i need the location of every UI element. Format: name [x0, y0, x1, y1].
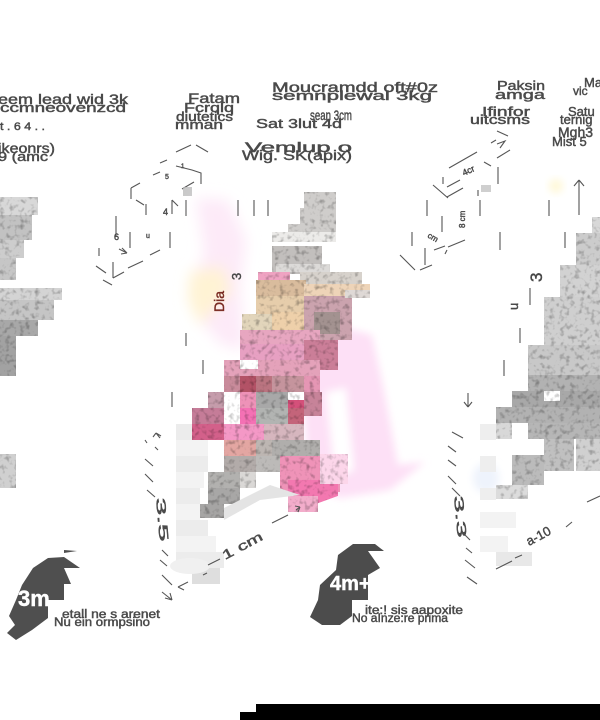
isometric box diagram: left: 4 — [163, 207, 168, 217]
heading: right spec text: vic — [573, 84, 588, 98]
heading: left spec text: eem lead wid 3k — [0, 91, 129, 107]
pale blue highlight — [473, 463, 499, 493]
caption: right badge — [352, 605, 463, 625]
pale shoe mosaic: bottom-centre — [170, 424, 300, 584]
isometric box diagram: right — [400, 131, 510, 270]
caption: right badge: No aInze:re prima — [352, 613, 449, 625]
isometric box diagram: right: 8 cm — [458, 210, 467, 228]
badge: left circular — [7, 550, 80, 640]
badge: right circular — [310, 544, 384, 625]
height label: right figure — [506, 273, 546, 310]
heading: right spec text: Mgh3 — [558, 124, 593, 140]
heading: right spec text: ternig — [560, 112, 593, 127]
heading: left-centre spec text: mman — [175, 117, 223, 132]
height label: right figure: 3 — [527, 273, 546, 282]
height label: left figure — [211, 273, 244, 312]
isometric box diagram: right: 4cr — [461, 163, 476, 178]
pink figure mosaic: centre — [192, 192, 370, 518]
heading: centre spec text: Sat 3lut 4d — [256, 116, 342, 131]
pale yellow spot — [549, 179, 563, 193]
heading: left spec text: t . 6 4 . . — [0, 121, 45, 133]
heading: right-centre spec text: Paksin — [497, 78, 545, 93]
heading: centre spec text: Wig. SK(apix) — [242, 147, 352, 163]
heading: centre spec text: semnplewal 3kg — [272, 88, 432, 103]
small parcel label: left box — [183, 187, 192, 196]
badge: left circular: 3m — [18, 586, 50, 611]
heading: centre spec text: sean 3cm — [310, 107, 352, 123]
heading: centre spec text: Vemlup o — [245, 139, 352, 155]
badge: right circular: 4m+ — [330, 573, 371, 595]
height dimension line: left figure — [172, 200, 268, 407]
caption: left badge — [54, 609, 161, 629]
heading: left-centre spec text: Fcrqlq — [184, 100, 234, 115]
small parcel label: right box — [481, 185, 491, 192]
base measurement labels: right figure: 3.3 — [451, 495, 470, 538]
pale shoe mosaic: right — [480, 424, 532, 566]
base measurement labels: left figure — [153, 497, 265, 563]
heading: left-centre spec text — [175, 90, 240, 132]
pale pink and yellow shape: centre-left — [188, 198, 246, 350]
heading: right spec text — [552, 75, 600, 149]
isometric box diagram: left: 6 — [114, 232, 119, 242]
height label: left figure: 3 — [229, 273, 244, 280]
caption: left badge: etall ne s arenet — [62, 609, 161, 621]
caption: left badge: Nu ein ormpsino — [54, 617, 150, 629]
base measurement labels: right figure — [451, 495, 553, 549]
base measurement labels: right figure: a-10 — [523, 523, 553, 549]
height label: left figure: Dia — [211, 291, 227, 312]
isometric box diagram: right: cm — [426, 231, 440, 244]
isometric box diagram: left: u — [146, 233, 150, 240]
base dimension: right figure — [448, 432, 600, 584]
heading: right-centre spec text: Ifinfor — [482, 104, 531, 119]
grey figure mosaic: right — [496, 217, 600, 499]
heading: centre spec text: Moucramdd oft#0z — [272, 79, 438, 95]
pale pink shape: centre-right — [300, 325, 425, 498]
black footer bar — [240, 704, 600, 720]
isometric box diagram: left — [96, 145, 208, 285]
heading: right spec text: Satu — [568, 104, 595, 119]
base measurement labels: left figure: 3.5 — [153, 497, 172, 542]
height label: right figure: u — [506, 303, 521, 310]
isometric box diagram: left: 5 — [165, 174, 169, 181]
heading: right-centre spec text — [470, 78, 546, 127]
heading: right-centre spec text: amga — [495, 87, 546, 102]
base measurement labels: left figure: 1 cm — [219, 529, 265, 563]
heading: right spec text: Mist 5 — [552, 134, 587, 149]
grey figure mosaic: left — [0, 197, 62, 488]
caption: right badge: ite:! sis aapoxite — [365, 605, 463, 617]
isometric box diagram: left: 1 — [181, 164, 185, 170]
heading: centre spec text — [242, 79, 438, 163]
heading: left-centre spec text: Fatam — [188, 90, 240, 106]
heading: left spec text: ccmneovenzcd — [0, 100, 126, 115]
heading: left spec text — [0, 91, 129, 164]
height dimension line: right figure — [464, 180, 584, 407]
heading: right-centre spec text: uitcsms — [470, 112, 531, 127]
heading: left-centre spec text: diutetics — [176, 109, 234, 124]
base dimension: left figure — [145, 433, 300, 600]
